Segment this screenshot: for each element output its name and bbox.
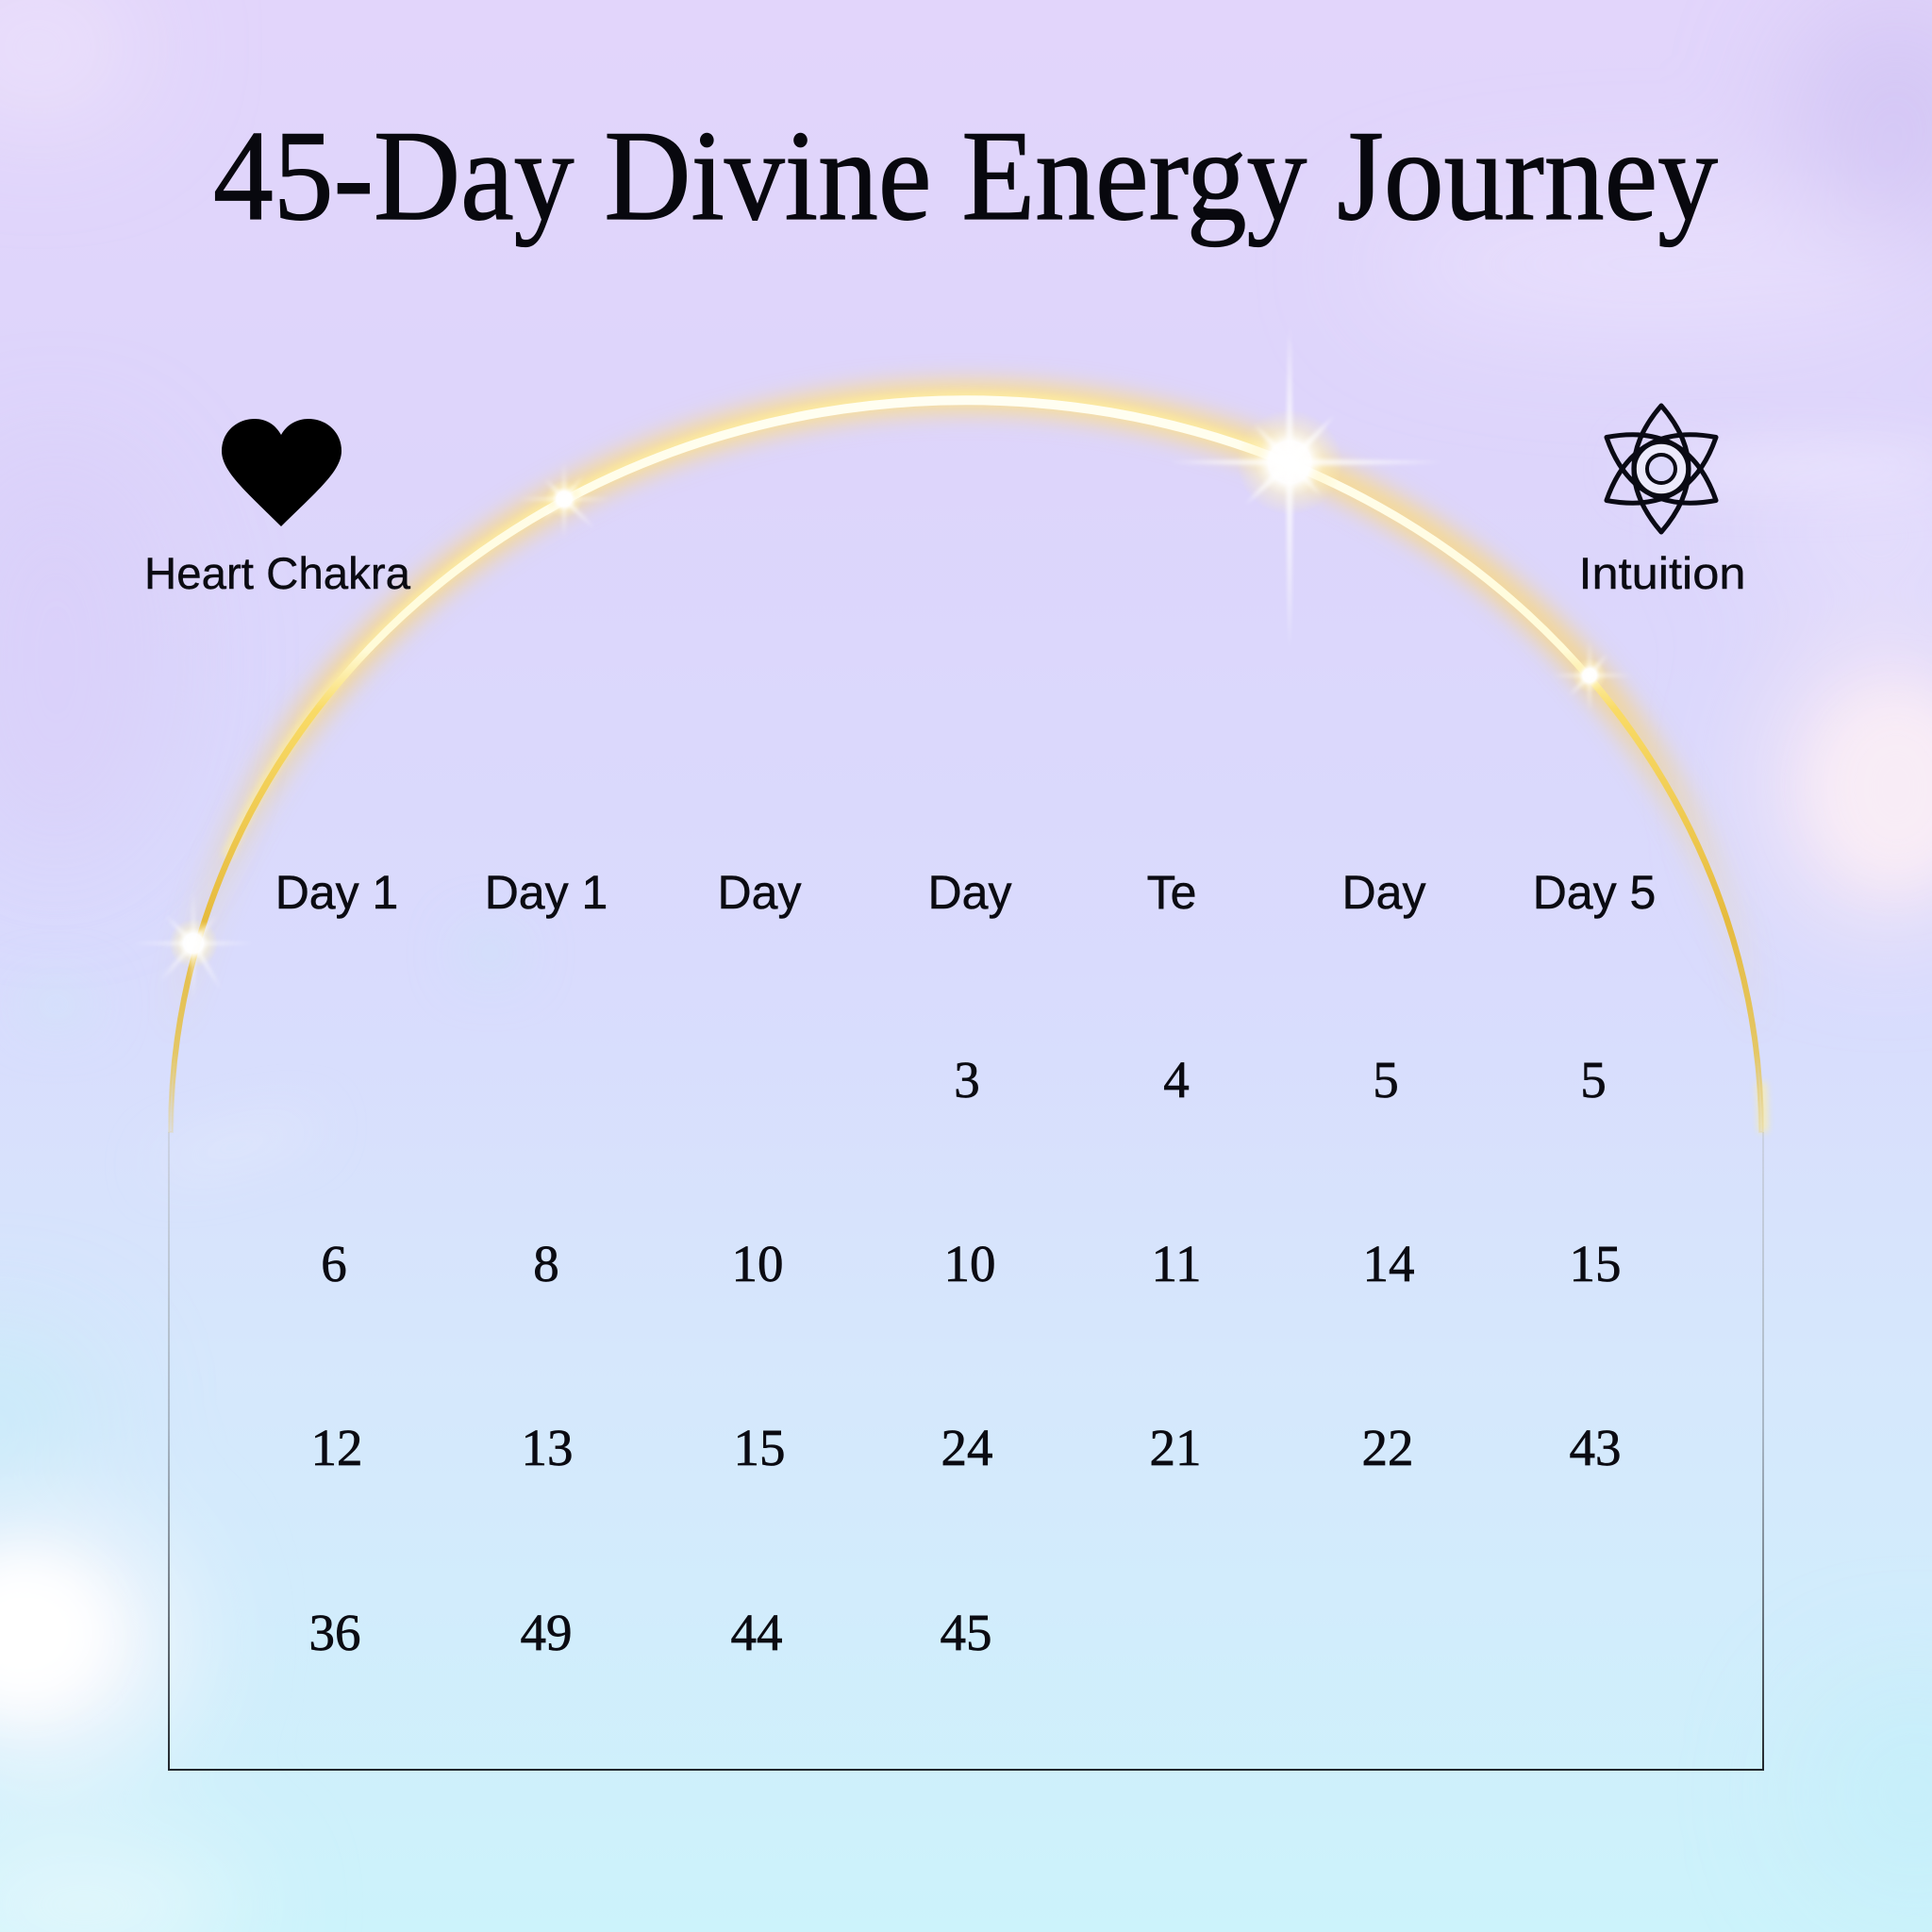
calendar header row: Day xyxy=(928,866,1011,919)
calendar row 4: 44 xyxy=(730,1604,783,1661)
golden arch frame xyxy=(169,396,1763,1770)
calendar row 2: 6 xyxy=(321,1235,347,1292)
calendar row 2: 10 xyxy=(732,1235,783,1292)
calendar header row xyxy=(275,866,1656,919)
title: 45-Day Divine Energy Journey xyxy=(213,104,1718,247)
calendar header row: Day 5 xyxy=(1533,866,1656,919)
sparkle: left arch star xyxy=(519,462,608,538)
calendar row 1: 4 xyxy=(1163,1051,1190,1108)
calendar row 3: 15 xyxy=(734,1419,785,1476)
calendar row 3: 22 xyxy=(1362,1419,1413,1476)
calendar row 2: 11 xyxy=(1152,1235,1201,1292)
calendar row 3: 43 xyxy=(1570,1419,1621,1476)
sparkle: large arch star xyxy=(1170,325,1443,651)
calendar row 3 xyxy=(311,1419,1621,1476)
calendar header row: Day xyxy=(1342,866,1425,919)
calendar row 3: 13 xyxy=(521,1419,574,1476)
label: Heart Chakra: Heart Chakra xyxy=(144,548,411,598)
calendar header row: Day 1 xyxy=(275,866,398,919)
calendar row 2 xyxy=(321,1235,1621,1292)
calendar row 4: 45 xyxy=(940,1604,992,1661)
calendar header row: Day xyxy=(718,866,801,919)
calendar row 4: 36 xyxy=(309,1604,360,1661)
sparkle: lower left arch star xyxy=(132,891,255,1000)
icon: intuition flower xyxy=(1592,406,1730,532)
calendar row 3: 24 xyxy=(941,1419,992,1476)
calendar row 3: 12 xyxy=(311,1419,362,1476)
calendar row 2: 10 xyxy=(943,1235,996,1292)
calendar row 1: 5 xyxy=(1580,1051,1607,1108)
calendar row 1: 5 xyxy=(1373,1051,1399,1108)
icon: heart xyxy=(222,419,341,526)
label: Intuition: Intuition xyxy=(1579,548,1745,598)
calendar header row: Te xyxy=(1147,866,1196,919)
calendar row 2: 14 xyxy=(1362,1235,1415,1292)
calendar header row: Day 1 xyxy=(485,866,608,919)
calendar row 1: 3 xyxy=(954,1051,980,1108)
calendar row 2: 8 xyxy=(533,1235,559,1292)
calendar row 3: 21 xyxy=(1149,1419,1202,1476)
calendar row 4 xyxy=(309,1604,992,1661)
calendar row 1 xyxy=(954,1051,1607,1108)
sparkle: right arch star xyxy=(1552,641,1632,712)
calendar row 2: 15 xyxy=(1570,1235,1621,1292)
calendar row 4: 49 xyxy=(521,1604,572,1661)
